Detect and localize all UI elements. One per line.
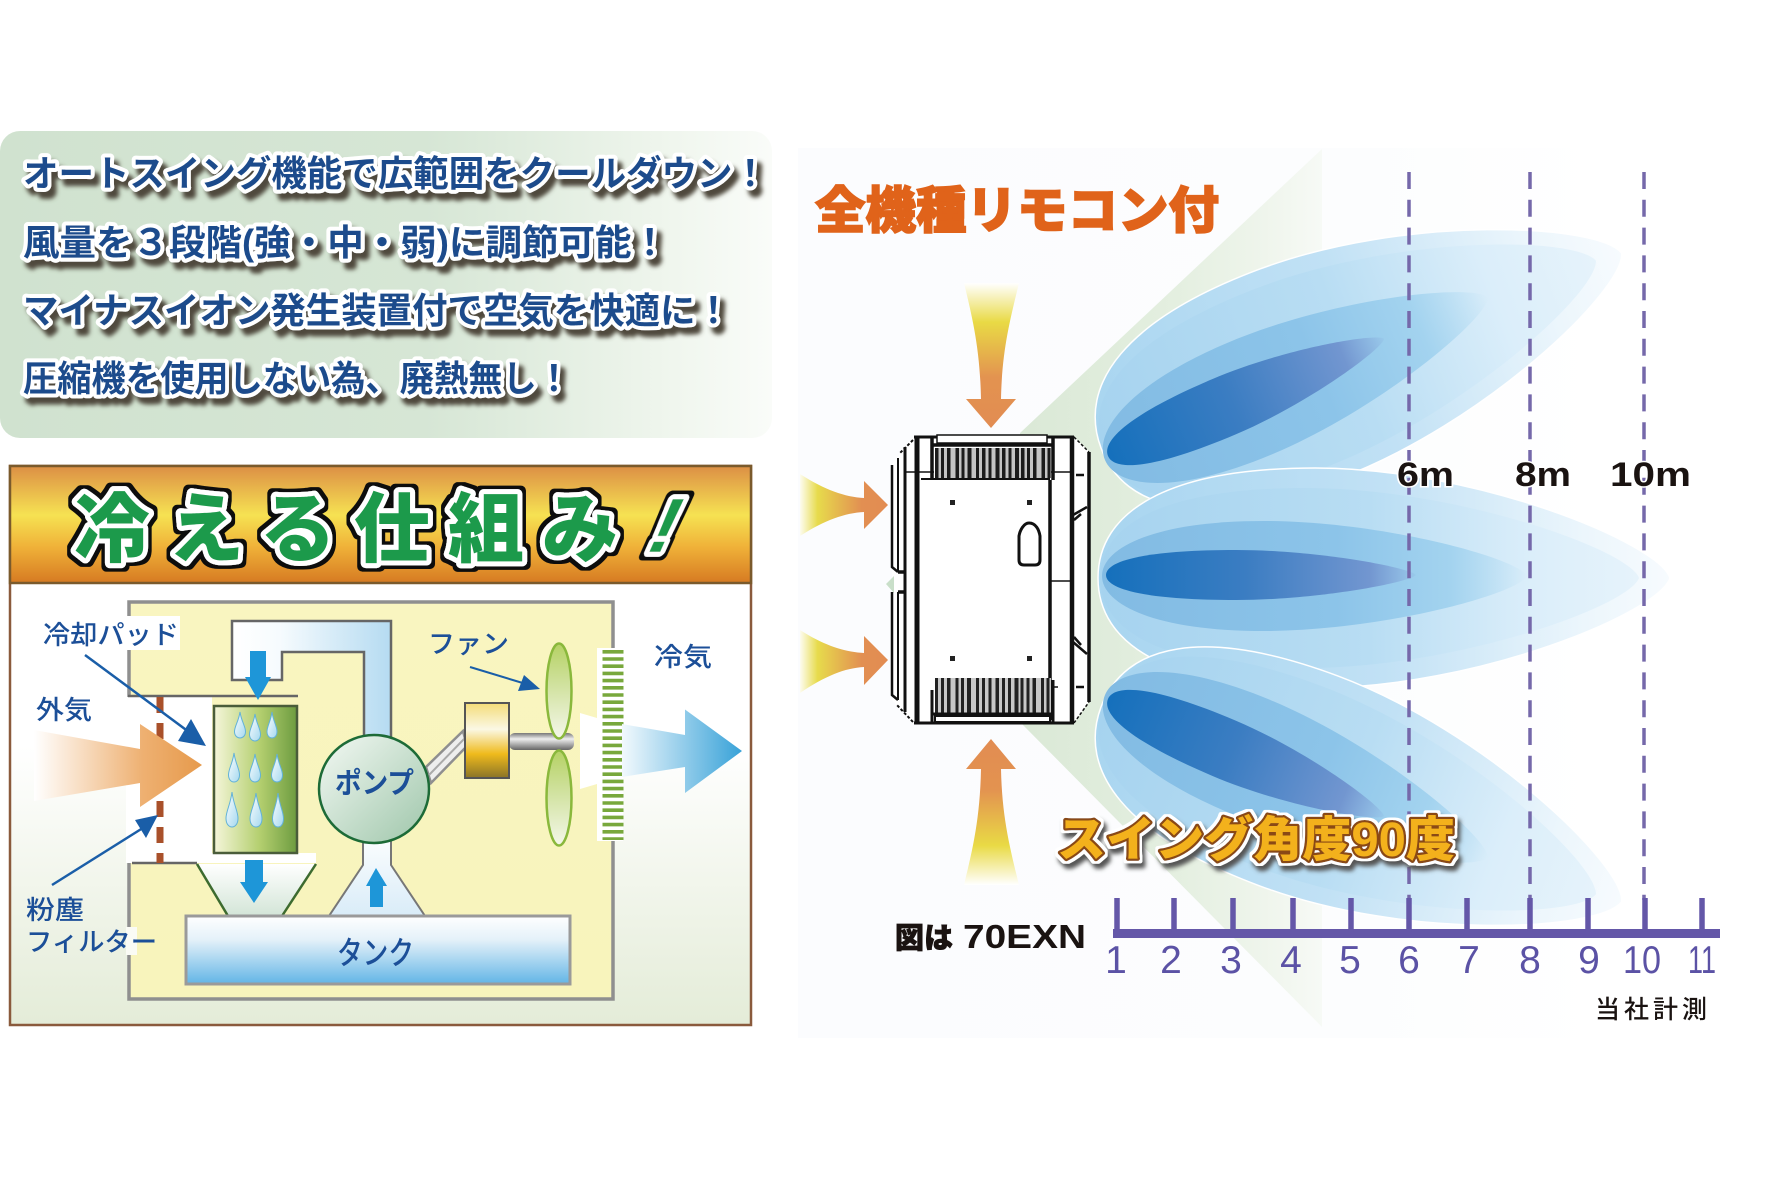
heading exclamation: ! <box>635 483 698 568</box>
dust filter <box>156 697 164 863</box>
arrow: left upper intake <box>800 474 888 536</box>
axis numbers: 8 <box>1519 939 1541 982</box>
label: remote control: 全機種リモコン付 <box>815 183 1219 239</box>
axis numbers: 3 <box>1220 939 1242 982</box>
bottom grille <box>932 678 1053 723</box>
water drops <box>226 712 284 827</box>
axis numbers: 2 <box>1160 939 1182 982</box>
label: cooling pad: 冷却パッド <box>43 620 179 650</box>
arrow: to cooling pad <box>85 655 206 746</box>
tank <box>186 916 570 984</box>
arrow: outside air in <box>34 724 202 807</box>
axis numbers: 7 <box>1458 939 1480 982</box>
arrow: water down duct <box>245 651 271 700</box>
device: unit top view <box>886 435 1090 723</box>
pump label: ポンプ <box>335 767 414 800</box>
distance axis <box>1105 898 1720 982</box>
label: swing angle: スイング角度90度 <box>1057 813 1455 867</box>
axis numbers: 10 <box>1623 939 1661 982</box>
grille <box>597 648 623 841</box>
motor shaft <box>509 733 574 750</box>
tank label: タンク <box>337 935 414 971</box>
arrow: water up to pump <box>366 868 387 907</box>
panel: swing airflow diagram <box>798 148 1720 1038</box>
distance labels: 10m <box>1610 456 1691 494</box>
heading text: 冷える仕組み <box>74 488 618 573</box>
panel: feature list <box>0 131 772 438</box>
top grille <box>921 435 1053 480</box>
label: fan: ファン <box>428 629 509 659</box>
axis numbers: 9 <box>1578 939 1600 982</box>
model note <box>895 918 1086 955</box>
measurement note: 当社計測 <box>1595 996 1707 1024</box>
feature line 3: マイナスイオン発生装置付で空気を快適に！ <box>23 290 731 331</box>
cooling pad <box>214 706 297 853</box>
axis numbers: 6 <box>1398 939 1420 982</box>
airflow lobe: middle <box>1098 468 1670 688</box>
axis numbers: 11 <box>1688 939 1716 982</box>
airflow lobe: upper <box>1062 148 1661 553</box>
feature line 1: オートスイング機能で広範囲をクールダウン！ <box>23 153 768 194</box>
airflow lobe: lower <box>1062 602 1661 1007</box>
distance labels: 8m <box>1515 456 1571 494</box>
distance guide lines <box>1409 172 1644 900</box>
axis numbers: 1 <box>1105 939 1127 982</box>
feature line 2: 風量を３段階(強・中・弱)に調節可能！ <box>23 222 668 263</box>
water duct <box>232 621 391 740</box>
arrow: bottom intake <box>964 739 1019 885</box>
axis numbers <box>1105 939 1716 982</box>
label: dust filter: 粉塵 <box>26 895 84 925</box>
axis numbers: 5 <box>1339 939 1361 982</box>
label: dust filter <box>26 815 158 957</box>
pump suction neck <box>329 838 425 916</box>
screw marks <box>950 500 1032 661</box>
distance labels: 6m <box>1397 456 1454 494</box>
model note: 図は <box>895 923 953 955</box>
panel: cooling mechanism <box>10 466 751 1025</box>
drain funnel <box>197 860 316 916</box>
fan blades <box>546 644 572 846</box>
arrow: cold air out <box>580 710 742 793</box>
heading banner <box>10 466 751 583</box>
distance labels <box>1397 456 1691 494</box>
label: dust filter: フィルター <box>26 927 157 957</box>
arrow: to dust filter <box>52 815 158 885</box>
axis numbers: 4 <box>1280 939 1302 982</box>
label: outside air: 外気 <box>36 695 92 725</box>
green swing wedge <box>1020 149 1322 1027</box>
arrow: to fan <box>470 667 540 691</box>
label: fan <box>428 629 540 691</box>
arrow: left lower intake <box>800 630 888 693</box>
label: cooling pad <box>43 620 206 746</box>
yellow unit casing <box>129 602 613 999</box>
belt: pump to motor <box>426 731 467 783</box>
arrow: top intake <box>964 283 1019 428</box>
arrow: water down to tank <box>240 860 268 903</box>
label: cold air: 冷気 <box>654 642 712 672</box>
model note: 70EXN <box>963 918 1086 955</box>
feature line 4: 圧縮機を使用しない為、廃熱無し！ <box>23 358 571 399</box>
motor <box>465 703 509 778</box>
pump <box>319 735 429 843</box>
